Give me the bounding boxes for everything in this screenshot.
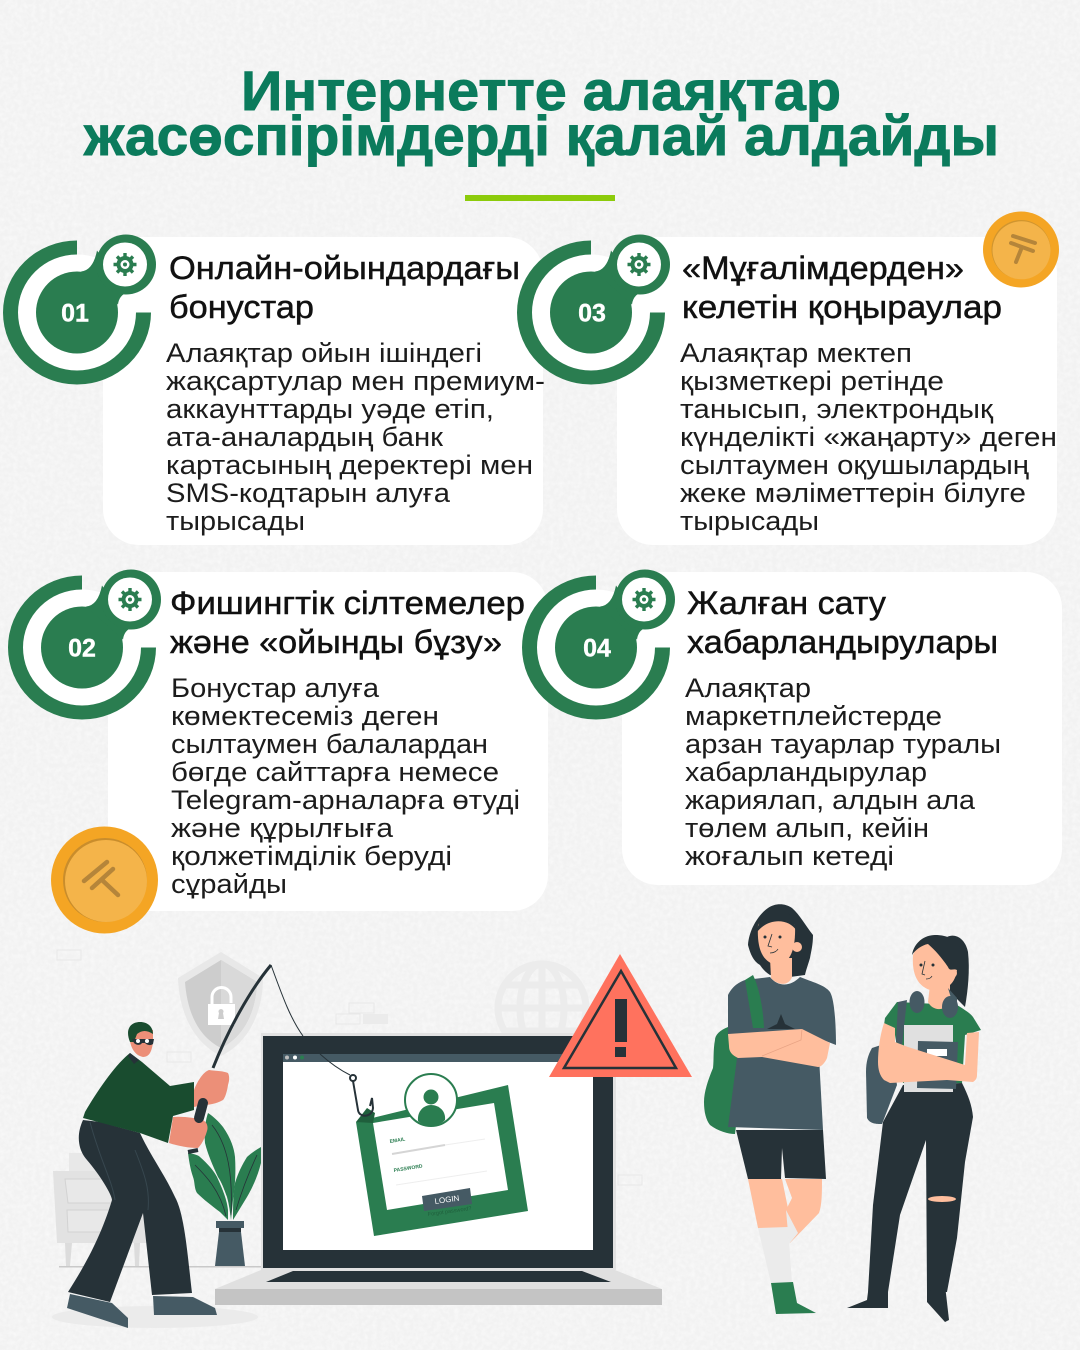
body text 03: Алаяқтар мектеп (680, 338, 912, 368)
illustration: laptop with login form (215, 965, 662, 1305)
shoes (847, 1292, 888, 1308)
heading 04 (687, 585, 998, 660)
body text 01 (166, 338, 545, 536)
illustration: background props (52, 950, 642, 1328)
illustration: warning triangle (549, 954, 692, 1077)
body text 01: тырысады (166, 506, 305, 536)
panel: card 04 fake sale ads (522, 570, 1062, 885)
faint wall bricks (57, 950, 642, 1185)
backpack (866, 1042, 897, 1124)
badge 03 (517, 234, 670, 384)
backpack (704, 1027, 745, 1134)
badge 03: 03 (578, 300, 606, 328)
strap (896, 1000, 907, 1045)
cabinet (53, 1153, 150, 1266)
login form card: LOGIN (434, 1194, 460, 1206)
heading 01: Онлайн-ойындардағы (169, 250, 520, 286)
body text 01: SMS-кодтарын алуға (166, 478, 451, 508)
body text 01: ата-аналардың банк (166, 422, 443, 452)
shoe (771, 1282, 816, 1314)
illustration: plant (188, 1113, 261, 1266)
crossed arms (728, 1029, 830, 1067)
body text 04: хабарландырулар (685, 757, 927, 787)
body text 02: сұрайды (171, 869, 287, 899)
heading 01 (169, 250, 520, 325)
body text 04: арзан тауарлар туралы (685, 729, 1001, 759)
badge 02: 02 (68, 634, 96, 662)
icon: globe (498, 964, 586, 1052)
badge 02 (8, 570, 161, 720)
login form card: PASSWORD (393, 1163, 423, 1174)
body text 04 (685, 673, 1001, 871)
title: жасөспірімдерді қалай алдайды (83, 104, 999, 167)
body text 03: тырысады (680, 506, 819, 536)
floor line (59, 1266, 264, 1268)
body text 03: сылтаумен оқушылардың (680, 450, 1029, 480)
body text 01: жақсартулар мен премиум- (166, 366, 545, 396)
body text 03 (680, 338, 1057, 536)
pants (868, 1083, 973, 1292)
body text 02: және құрылғыға (171, 813, 394, 843)
illustration: girl student (847, 935, 981, 1322)
body text 01: картасының деректері мен (166, 450, 533, 480)
body text 03: күнделікті «жаңарту» деген (680, 422, 1057, 452)
body text 03: танысып, электрондық (680, 394, 993, 424)
badge 01 (3, 234, 156, 384)
heading 02: және «ойынды бұзу» (170, 624, 502, 660)
body text 02: қолжетімділік беруді (171, 841, 452, 871)
panel: card 01 online game bonuses (3, 234, 545, 545)
fishing line and hook (271, 965, 373, 1116)
face (758, 915, 795, 965)
shorts (736, 1130, 826, 1179)
body text 01: аккаунттарды уәде етіп, (166, 394, 494, 424)
body text 04: жариялап, алдын ала (685, 785, 976, 815)
login form card: Forgot password? (427, 1206, 472, 1218)
legs (748, 1179, 792, 1228)
fishing rod (213, 965, 271, 1068)
socks (758, 1227, 792, 1283)
body text 03: жеке мәліметтерін білуге (680, 478, 1026, 508)
body text 04: жоғалып кетеді (685, 841, 894, 871)
hair (912, 935, 962, 970)
heading 01: бонустар (169, 289, 314, 325)
body text 04: төлем алып, кейін (685, 813, 929, 843)
body text 02: Telegram-арналарға өтуді (171, 785, 520, 815)
t-shirt (728, 977, 836, 1130)
panel: card 03 calls from teachers (517, 234, 1057, 545)
shoes (67, 1294, 128, 1328)
icon: tenge coin top right (983, 212, 1059, 288)
heading 03 (682, 250, 1002, 325)
heading 02: Фишингтік сілтемелер (170, 585, 525, 621)
badge 04 (522, 570, 675, 720)
icon: shield with lock (178, 952, 263, 1056)
badge 01: 01 (61, 300, 89, 328)
neck and face (928, 985, 950, 1009)
rod handle (199, 1103, 203, 1118)
arms (878, 1023, 979, 1083)
heading 03: «Мұғалімдерден» (682, 250, 964, 286)
illustration: hacker fishing (67, 965, 271, 1328)
body text 04: Алаяқтар (685, 673, 811, 703)
hair back (748, 904, 813, 977)
icon: tenge coin lower left (51, 826, 158, 934)
body text 02: көмектесеміз деген (171, 701, 439, 731)
star (767, 1014, 795, 1029)
body text 02 (171, 673, 520, 899)
login form card: EMAIL (389, 1137, 406, 1145)
body text 02: сылтаумен балалардан (171, 729, 488, 759)
login form card (356, 1074, 528, 1236)
illustration: boy student (704, 904, 836, 1314)
pants (68, 1120, 192, 1302)
t-shirt (884, 1002, 981, 1083)
neck (770, 958, 792, 984)
body text 04: маркетплейстерде (685, 701, 942, 731)
title: Интернетте алаяқтар (241, 59, 841, 122)
body text 02: Бонустар алуға (171, 673, 380, 703)
body text 02: бөгде сайттарға немесе (171, 757, 499, 787)
books (904, 1025, 953, 1092)
heading 04: Жалған сату (687, 585, 886, 621)
panel: card 02 phishing links (8, 570, 548, 911)
body text 01: Алаяқтар ойын ішіндегі (166, 338, 482, 368)
heading 04: хабарландырулары (687, 624, 998, 660)
headphones (910, 988, 958, 1018)
badge 04: 04 (583, 634, 611, 662)
heading 03: келетін қоңыраулар (682, 289, 1002, 325)
heading 02 (170, 585, 525, 660)
body text 03: қызметкері ретінде (680, 366, 944, 396)
title underline (465, 195, 615, 201)
hands (194, 1070, 229, 1107)
title (83, 59, 999, 167)
laptop base (215, 1270, 662, 1289)
head (129, 1028, 153, 1057)
jacket (83, 1053, 194, 1143)
ponytail (947, 936, 969, 1007)
strap (745, 975, 764, 1028)
